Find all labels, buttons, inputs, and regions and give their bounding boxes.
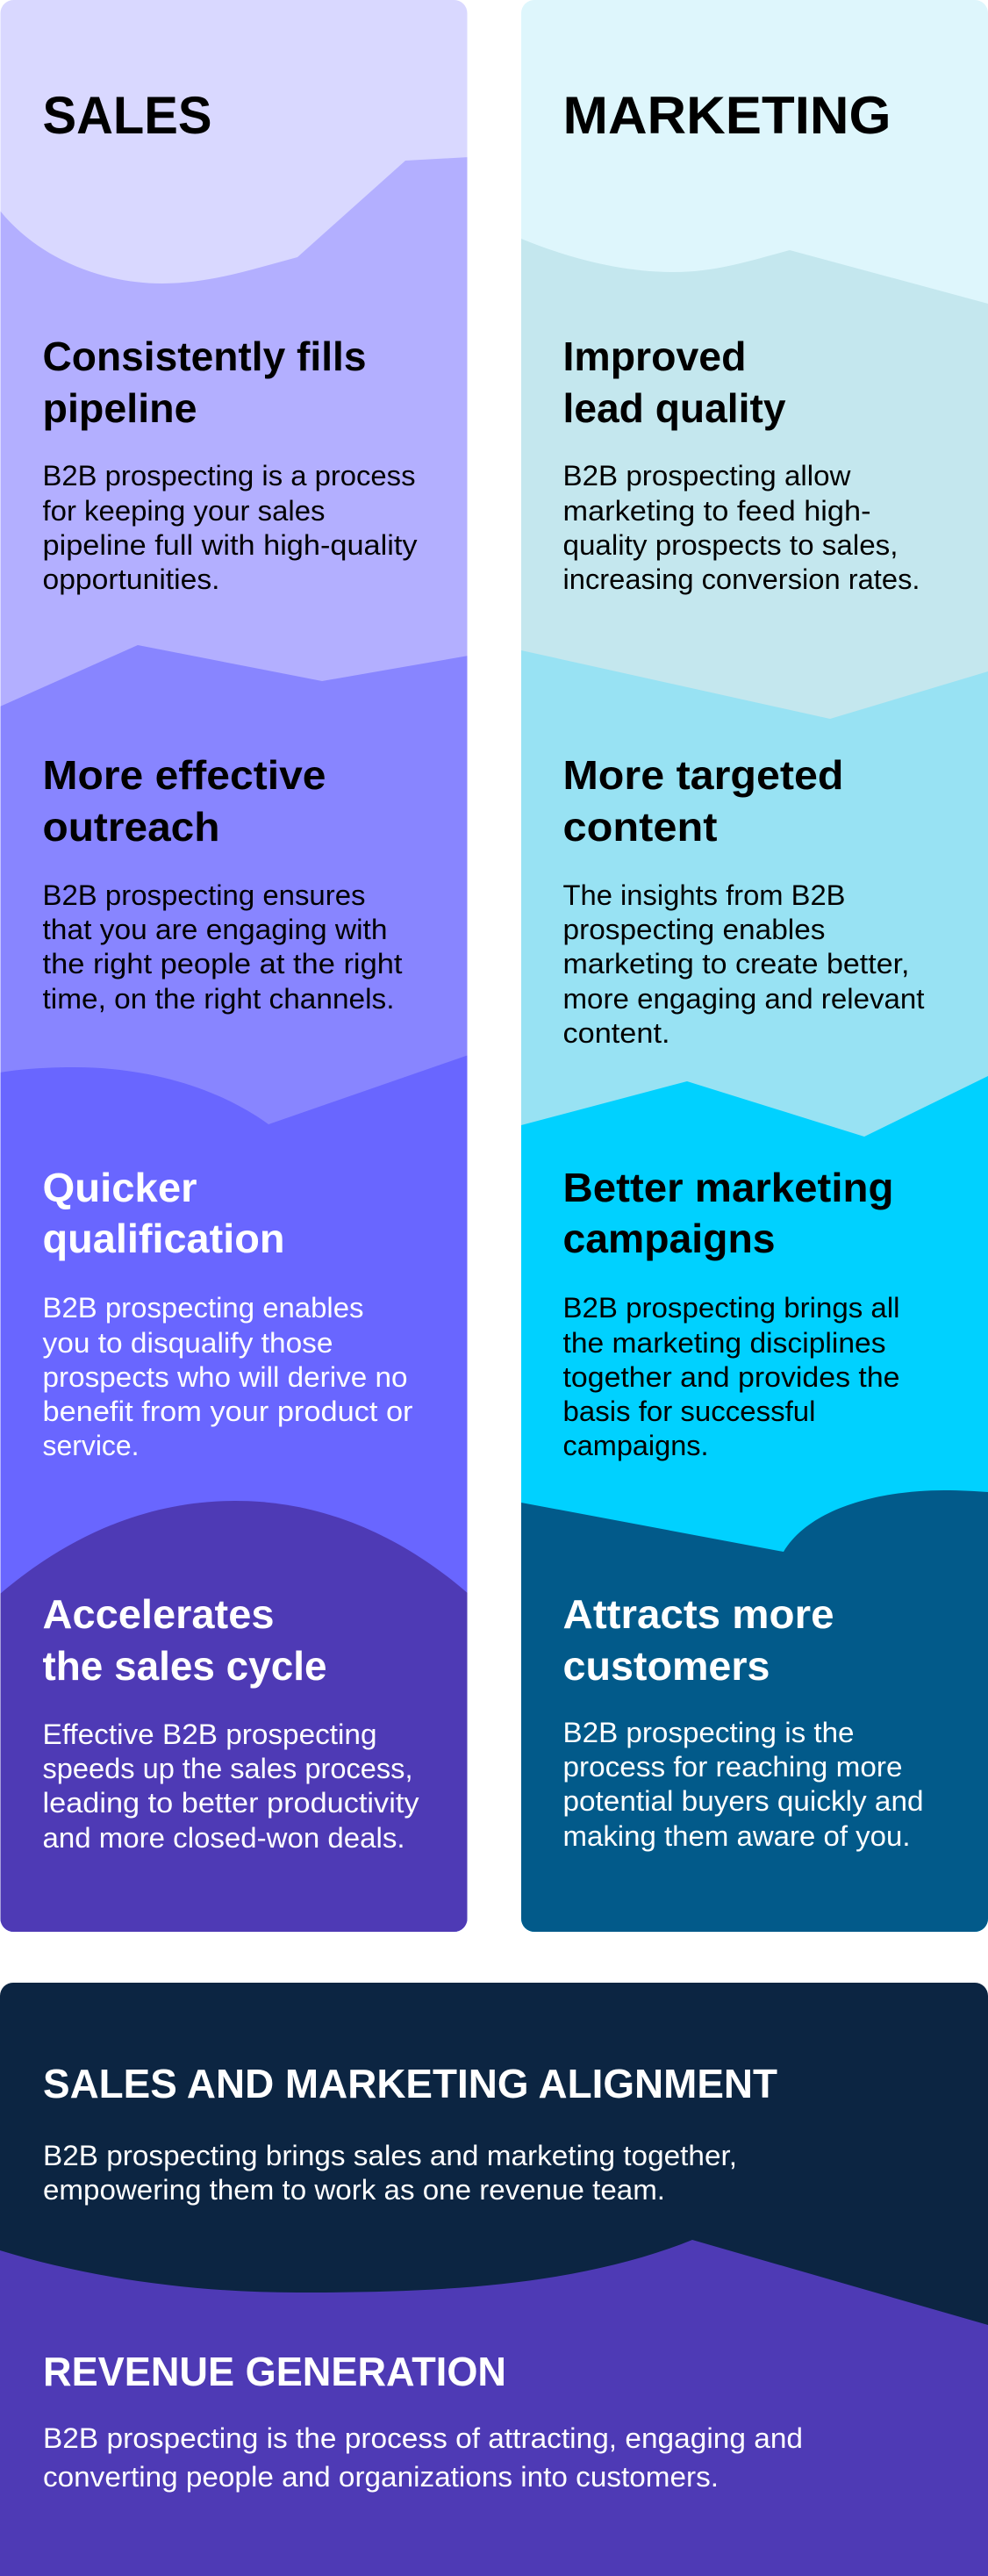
block: quicker qualification: B2B prospecting enables <box>42 1292 363 1324</box>
block: accelerates the sales cycle: Effective B2B prospecting <box>42 1719 377 1750</box>
block: attracts more customers: Attracts more <box>563 1591 834 1637</box>
block: accelerates the sales cycle: and more closed-won deals. <box>42 1822 405 1854</box>
panel: marketing column <box>521 0 988 1940</box>
block: better marketing campaigns: campaigns <box>563 1216 776 1261</box>
block: more effective outreach: time, on the right channels. <box>42 983 395 1015</box>
block: more targeted content <box>563 752 925 1049</box>
block: more targeted content: The insights from B2B <box>563 879 846 911</box>
block: more effective outreach: the right people at the right <box>42 948 403 979</box>
block: improved lead quality: lead quality <box>563 385 786 431</box>
panel: alignment and revenue <box>0 1983 988 2576</box>
block: better marketing campaigns: together and provides the <box>563 1361 900 1393</box>
block: more targeted content: prospecting enables <box>563 914 825 945</box>
block: more effective outreach <box>42 752 403 1015</box>
block: accelerates the sales cycle: Accelerates <box>42 1591 274 1637</box>
block: better marketing campaigns: basis for successful <box>563 1396 816 1427</box>
block: improved lead quality: increasing conversion rates. <box>563 563 920 595</box>
block: more targeted content: more engaging and relevant <box>563 983 925 1015</box>
block: improved lead quality: B2B prospecting allow <box>563 460 851 492</box>
block: quicker qualification: qualification <box>42 1216 284 1261</box>
block: improved lead quality: Improved <box>563 334 746 379</box>
block: more targeted content: marketing to create better, <box>563 948 909 979</box>
block: attracts more customers: making them aware of you. <box>563 1820 911 1852</box>
block: improved lead quality: quality prospects to sales, <box>563 529 899 561</box>
marketing column background layers <box>521 0 988 1940</box>
block: attracts more customers <box>563 1591 923 1852</box>
block: revenue generation: REVENUE GENERATION <box>43 2349 506 2394</box>
block: revenue generation <box>43 2349 803 2493</box>
sales column background layers <box>0 0 469 1940</box>
block: more targeted content: content. <box>563 1017 670 1049</box>
block: quicker qualification: service. <box>42 1430 139 1461</box>
block: better marketing campaigns: campaigns. <box>563 1430 709 1461</box>
block: quicker qualification: you to disqualify those <box>42 1327 333 1359</box>
block: accelerates the sales cycle <box>42 1591 419 1854</box>
block: consistently fills pipeline: opportunities. <box>42 563 220 595</box>
block: quicker qualification: Quicker <box>42 1165 197 1210</box>
block: sales and marketing alignment: B2B prospecting brings sales and marketing together, <box>43 2140 737 2171</box>
bottom panel background layers <box>0 1983 988 2576</box>
block: more targeted content: content <box>563 804 718 850</box>
block: accelerates the sales cycle: speeds up the sales process, <box>42 1753 412 1784</box>
block: quicker qualification: prospects who will derive no <box>42 1361 407 1393</box>
block: better marketing campaigns: Better marketing <box>563 1165 893 1210</box>
block: accelerates the sales cycle: the sales cycle <box>42 1643 326 1689</box>
block: more effective outreach: that you are engaging with <box>42 914 388 945</box>
block: improved lead quality <box>563 334 920 595</box>
heading: sales: SALES <box>42 86 212 145</box>
block: revenue generation: converting people and organizations into customers. <box>43 2461 719 2493</box>
block: sales and marketing alignment <box>43 2061 777 2206</box>
block: more targeted content: More targeted <box>563 752 844 798</box>
block: consistently fills pipeline: pipeline full with high-quality <box>42 529 418 561</box>
block: consistently fills pipeline: Consistently fills <box>42 334 367 379</box>
block: more effective outreach: outreach <box>42 804 219 850</box>
block: quicker qualification <box>42 1165 413 1461</box>
block: attracts more customers: potential buyers quickly and <box>563 1785 923 1817</box>
block: consistently fills pipeline <box>42 334 418 595</box>
block: better marketing campaigns <box>563 1165 900 1461</box>
block: consistently fills pipeline: B2B prospecting is a process <box>42 460 416 492</box>
block: consistently fills pipeline: for keeping your sales <box>42 495 325 527</box>
block: more effective outreach: B2B prospecting ensures <box>42 879 366 911</box>
block: quicker qualification: benefit from your product or <box>42 1396 413 1427</box>
block: sales and marketing alignment: empowering them to work as one revenue team. <box>43 2174 665 2206</box>
block: attracts more customers: customers <box>563 1643 770 1689</box>
block: attracts more customers: process for reaching more <box>563 1751 902 1783</box>
block: better marketing campaigns: the marketing disciplines <box>563 1327 886 1359</box>
block: revenue generation: B2B prospecting is the process of attracting, engaging and <box>43 2422 803 2454</box>
block: attracts more customers: B2B prospecting is the <box>563 1717 855 1748</box>
block: consistently fills pipeline: pipeline <box>42 385 197 431</box>
block: sales and marketing alignment: SALES AND MARKETING ALIGNMENT <box>43 2061 777 2106</box>
block: more effective outreach: More effective <box>42 752 326 798</box>
heading: marketing: MARKETING <box>563 86 891 145</box>
panel: sales column <box>0 0 469 1940</box>
block: improved lead quality: marketing to feed high- <box>563 495 870 527</box>
block: better marketing campaigns: B2B prospecting brings all <box>563 1292 900 1324</box>
block: accelerates the sales cycle: leading to better productivity <box>42 1787 419 1819</box>
